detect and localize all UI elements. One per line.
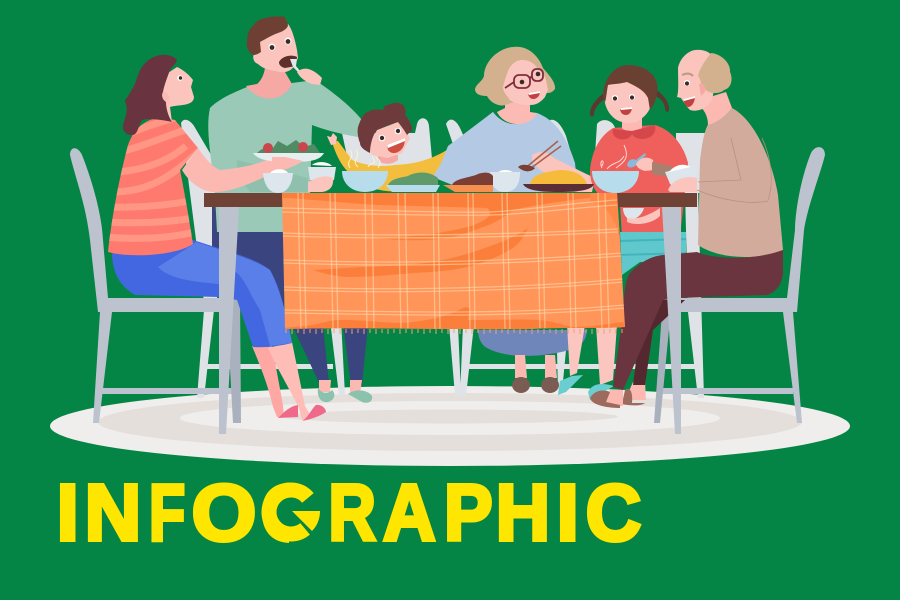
cloth fringe [286, 329, 622, 334]
man sweater [208, 80, 362, 232]
back chairs [181, 118, 706, 398]
family dinner illustration [50, 16, 850, 543]
girl slippers [558, 375, 583, 395]
woman face [160, 67, 194, 122]
girl legs [558, 325, 617, 400]
grandfather feet [590, 382, 646, 408]
woman arm [182, 148, 303, 192]
man feet and slippers [318, 380, 372, 403]
title: H [496, 468, 550, 557]
grandfather hand [668, 177, 697, 192]
grandmother mouth [528, 91, 540, 99]
title: I [57, 468, 79, 557]
grandfather sweater [698, 108, 783, 257]
girl neck [622, 118, 642, 131]
title: C [586, 468, 641, 557]
woman legs [252, 342, 312, 420]
man hand [297, 69, 322, 85]
man hair [247, 16, 288, 55]
title: I [557, 468, 579, 557]
steam [601, 145, 626, 169]
steam left [349, 150, 380, 168]
girl [590, 65, 690, 275]
grandmother neck [497, 100, 537, 124]
child hands [327, 133, 454, 156]
rug [50, 386, 850, 466]
grandfather [665, 50, 783, 257]
girl hand [636, 158, 654, 171]
tablecloth [282, 193, 626, 334]
girl collar [613, 125, 655, 139]
girl hair [603, 65, 657, 110]
grandfather mouth [683, 96, 695, 107]
trousers highlight [158, 242, 292, 346]
right front chair [654, 147, 825, 423]
woman fingers over plate [272, 157, 303, 173]
meat plate [443, 173, 493, 192]
child head [368, 122, 410, 158]
girl braids [590, 93, 606, 117]
salad plate [253, 140, 324, 162]
grandmother hair [475, 47, 555, 105]
title [57, 468, 641, 557]
girl shirt [590, 125, 688, 237]
girl head [605, 80, 652, 123]
title: G [261, 468, 322, 557]
grandmother face [503, 60, 548, 105]
grandmother arm [532, 152, 595, 192]
man neck [246, 66, 292, 98]
grandfather sweater arm lines [697, 138, 771, 202]
girl mouth [620, 107, 632, 115]
child hair [358, 103, 412, 153]
man head [253, 24, 298, 72]
woman slippers [278, 405, 326, 421]
woman hair [123, 55, 177, 135]
cloth folds [282, 193, 626, 330]
woman ear [162, 92, 169, 102]
food on chopsticks [518, 165, 535, 171]
bowls of rice [263, 162, 520, 193]
noodle dish [523, 170, 594, 192]
grandmother skirt and legs [478, 330, 587, 393]
greens plate [385, 172, 440, 192]
title: O [192, 468, 256, 557]
blue bowl left [342, 171, 388, 192]
child mouth [387, 138, 405, 153]
man food and fork [279, 56, 297, 68]
child sweater [332, 141, 452, 191]
title: R [328, 468, 376, 557]
plaid lines [282, 193, 625, 330]
woman [104, 55, 326, 421]
man trousers [212, 200, 284, 333]
girl sleeve [652, 162, 672, 178]
spoon [627, 153, 646, 167]
title: N [85, 468, 141, 557]
woman trousers [112, 240, 292, 347]
grandmother glasses [505, 69, 543, 88]
grandfather trousers [613, 250, 783, 390]
shirt stripes [104, 118, 200, 238]
girl skirt [620, 232, 686, 275]
table top [204, 193, 697, 207]
grandmother slippers [512, 377, 530, 393]
man [208, 16, 372, 403]
table leg left [219, 207, 239, 434]
grandfather bowl [665, 165, 696, 186]
chopsticks [523, 141, 561, 171]
grandmother blouse [435, 112, 578, 192]
grandfather ear [699, 83, 705, 96]
table leg right [662, 207, 681, 434]
grandfather brow [682, 74, 693, 76]
child neck [378, 155, 398, 164]
grandmother [432, 47, 595, 192]
title: P [444, 468, 493, 557]
G wedge [269, 480, 325, 546]
woman shirt [108, 118, 198, 255]
girl bowl and hand under table [623, 208, 660, 224]
title: F [149, 468, 185, 557]
blue bowl right [592, 171, 639, 193]
grandfather hair [698, 53, 732, 93]
grandfather neck [696, 92, 732, 125]
left front chair [70, 148, 241, 423]
title: A [383, 468, 436, 557]
grandfather head [677, 50, 714, 111]
child [327, 103, 454, 191]
